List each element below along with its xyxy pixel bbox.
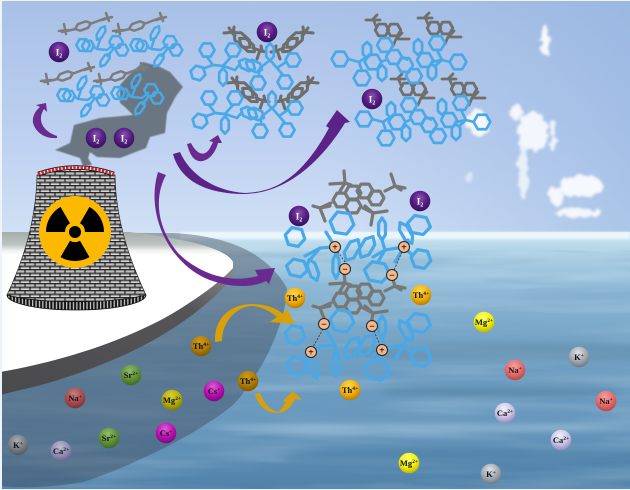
gray pyrene units [366,13,485,105]
iodine spheres: I [264,28,267,38]
metal ion spheres: Cs [160,428,169,438]
metal ion spheres: Mg [163,395,175,405]
metal ion spheres: K [486,469,493,479]
metal ion spheres: 2+ [63,447,69,453]
adsorbent: lower pyrene [313,271,405,325]
blue framework layers [332,36,490,145]
gold arrow: upper [215,304,295,342]
metal ion spheres: 2+ [507,409,513,415]
icon: radiation symbol [39,196,111,268]
metal ion spheres: 4+ [203,342,209,348]
metal ion spheres: 2+ [175,396,181,402]
iodine spheres: 2 [124,140,127,146]
iodine spheres: 2 [420,202,423,208]
adsorbent: upper pyrene [313,171,405,225]
metal ion spheres: Cs [208,386,217,396]
cluster: covalent framework [332,13,490,145]
purple arrow: small left [33,103,57,138]
iodine spheres: 2 [299,218,302,224]
clouds [467,26,604,218]
sky background [0,0,630,234]
metal ion spheres: 4+ [297,294,303,300]
metal ion spheres: K [574,352,581,362]
blue frameworks [189,43,303,138]
purple arrow: large to adsorbent [155,172,275,286]
gray linker molecules [41,13,166,84]
metal ion spheres: 2+ [487,318,493,324]
iodine spheres: I [121,134,124,144]
metal ion spheres: 4+ [352,386,358,392]
charged sites: + [401,242,407,254]
gold arrow: lower [255,391,302,413]
charged sites: + [379,346,385,356]
tower ribbed base [7,295,146,310]
metal ion spheres: 4+ [423,291,429,297]
smoke plume [55,62,183,166]
metal ion spheres: Th [287,293,297,303]
metal ion spheres: Th [342,385,352,395]
adsorbent: upper blue layer [283,211,432,283]
metal ion spheres: Th [240,376,250,386]
metal ion spheres: K [13,440,20,450]
iodine spheres: I [93,134,96,144]
metal ion spheres: 2+ [412,459,418,465]
metal ion spheres [8,285,616,484]
metal ion spheres: + [79,394,82,400]
metal ion spheres: + [519,366,522,372]
metal ion spheres: 2+ [132,371,138,377]
metal ion spheres: + [217,387,220,393]
iodine spheres: I [369,94,372,104]
metal ion spheres: Na [68,393,79,403]
cooling tower [7,168,146,310]
tower rim [38,168,114,174]
metal ion spheres: Ca [53,446,63,456]
charged sites: − [389,270,395,282]
iodine spheres: 2 [372,100,375,106]
ionic interaction dashes [313,252,402,347]
charged sites: − [342,264,348,276]
metal ion spheres: + [20,441,23,447]
metal ion spheres: + [581,353,584,359]
sea background with wave texture [0,232,630,490]
iodine spheres: 2 [59,54,62,60]
purple arrow: small middle [187,135,222,161]
metal ion spheres: 2+ [110,434,116,440]
metal ion spheres: + [610,397,613,403]
metal ion spheres: Na [508,365,519,375]
charged sites [306,242,410,358]
iodine spheres: 2 [96,140,99,146]
iodine spheres [49,22,430,226]
metal ion spheres: 2+ [563,436,569,442]
cluster: free molecules with iodine [41,13,182,118]
metal ion spheres: Mg [400,458,412,468]
metal ion spheres: Na [599,396,610,406]
charged sites: − [321,320,327,330]
metal ion spheres: Sr [102,433,110,443]
iodine spheres: 2 [267,34,270,40]
shadow overlay of contaminated water [0,232,287,487]
metal ion spheres: Sr [124,370,132,380]
charged sites: + [332,242,338,254]
iodine spheres: I [56,48,59,58]
metal ion spheres: Th [193,341,203,351]
iodine spheres: I [417,196,420,206]
iodine spheres: I [296,212,299,222]
metal ion spheres: + [169,429,172,435]
blue monomers [57,25,182,118]
metal ion spheres: Ca [497,408,507,418]
metal ion spheres: Ca [553,435,563,445]
adsorbent: lower blue layer [283,309,432,381]
metal ion spheres: Th [413,290,423,300]
metal ion spheres: Mg [475,317,487,327]
charged sites: − [369,322,375,332]
tower brick body [7,168,146,308]
cluster: assembled oligomer [189,27,318,138]
land platform [0,232,233,372]
charged sites: + [308,348,314,358]
purple arrow: large to framework [173,110,350,194]
metal ion spheres: + [493,470,496,476]
gray tilted units [224,27,318,109]
metal ion spheres: 4+ [250,377,256,383]
land platform edge [0,268,233,395]
